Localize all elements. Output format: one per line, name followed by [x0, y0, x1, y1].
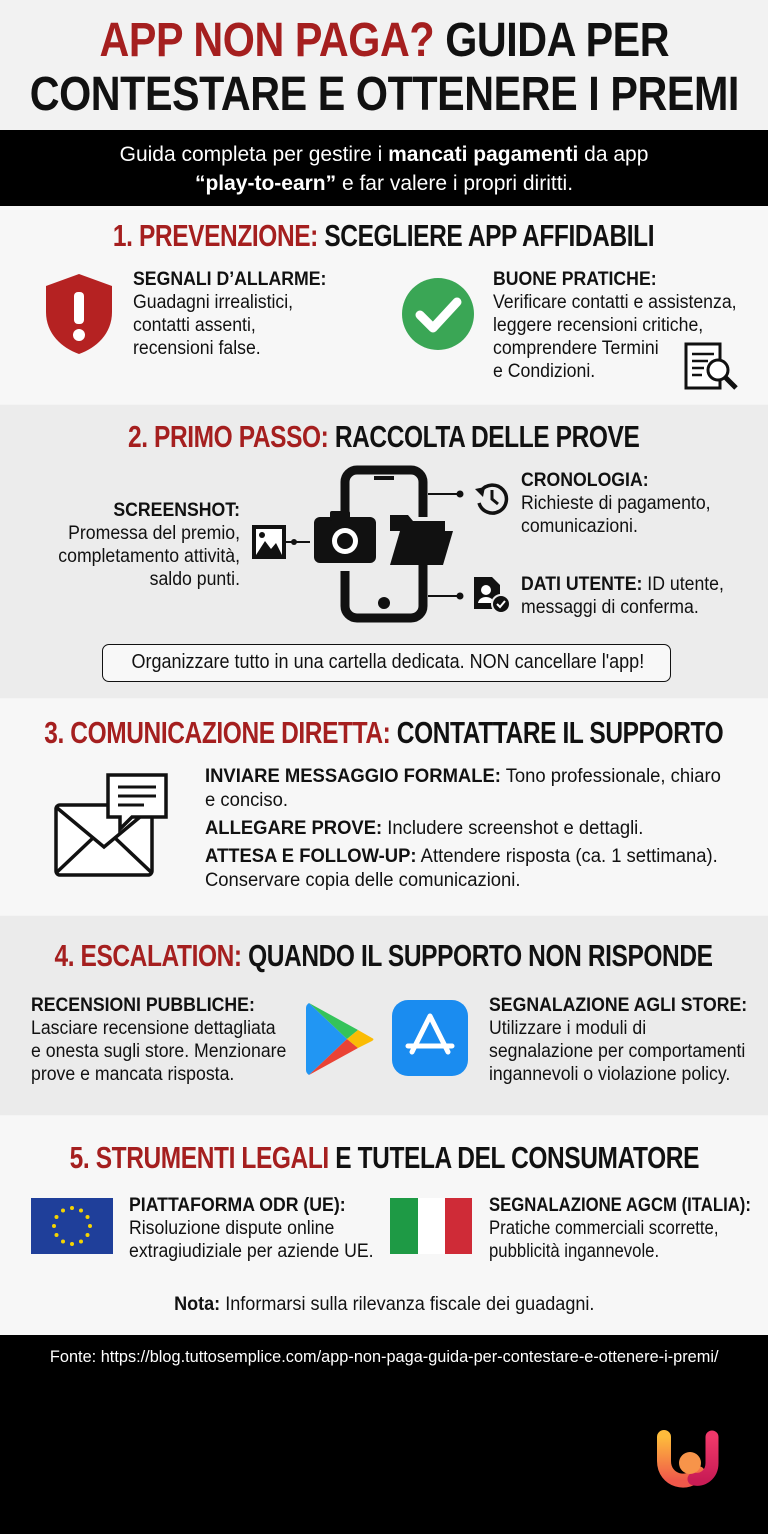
text: segnali: recensioni false. [133, 338, 261, 359]
text: buone pratiche: e Condizioni. [493, 361, 595, 382]
section 3 [0, 699, 768, 915]
section 5 [0, 1116, 768, 1335]
text: cronologia: CRONOLOGIA: [521, 470, 649, 491]
text: steps: INVIARE MESSAGGIO FORMALE: Tono professionale, chiaro [205, 766, 721, 787]
text: recensioni [31, 995, 286, 1085]
subtitle band: “play-to-earn” e far valere i propri diritti. [195, 172, 573, 195]
text: segnali [133, 269, 326, 359]
text: buone pratiche: leggere recensioni critiche, [493, 315, 703, 336]
text: screenshot [58, 500, 240, 590]
icon: warning shield [46, 274, 112, 354]
section 1 [0, 206, 768, 404]
icon: mail [54, 773, 168, 877]
text: screenshot: Promessa del premio, [68, 523, 240, 544]
logo [657, 1430, 718, 1488]
text: AGCM: Pratiche commerciali scorrette, [489, 1218, 719, 1239]
text: segnali: Guadagni irrealistici, [133, 292, 293, 313]
text: segnalazione store: Utilizzare i moduli di [489, 1018, 646, 1039]
heading 2: 2. PRIMO PASSO: RACCOLTA DELLE PROVE [128, 419, 640, 454]
icon: app store [392, 1000, 468, 1076]
heading 1: 1. PREVENZIONE: SCEGLIERE APP AFFIDABILI [113, 218, 655, 253]
text: steps: e conciso. ALLEGARE PROVE: Includere screenshot e dettagli. ATTESA E FOLLOW-UP: Attendere risposta (ca. 1 settimana). [205, 790, 718, 867]
section 4 [0, 916, 768, 1115]
title: APP NON PAGA? GUIDA PER [99, 14, 669, 67]
callout [102, 644, 671, 682]
text: screenshot: SCREENSHOT: [113, 500, 240, 521]
text: segnalazione store: SEGNALAZIONE AGLI STORE: [489, 995, 747, 1016]
text: AGCM [489, 1195, 751, 1262]
icon: check [402, 278, 474, 350]
text: ODR: Risoluzione dispute online [129, 1218, 334, 1239]
text: ODR [129, 1195, 374, 1262]
text: ODR: PIATTAFORMA ODR (UE): [129, 1195, 346, 1216]
icon: document search [684, 342, 738, 390]
footer [0, 1335, 768, 1534]
text: cronologia: Richieste di pagamento, [521, 493, 711, 514]
text: ODR: extragiudiziale per aziende UE. [129, 1241, 374, 1262]
text: AGCM: pubblicità ingannevole. [489, 1241, 659, 1262]
text: steps: Conservare copia delle comunicazioni. [205, 870, 521, 891]
text: buone pratiche [493, 269, 737, 382]
icon: Italy flag [390, 1198, 472, 1254]
text: dati utente: DATI UTENTE: ID utente, [521, 574, 724, 595]
text: cronologia: comunicazioni. [521, 516, 638, 537]
text: segnali: SEGNALI D’ALLARME: [133, 269, 326, 290]
text: screenshot: completamento attività, [58, 546, 240, 567]
text: segnalazione store: segnalazione per comportamenti [489, 1041, 745, 1062]
text: recensioni: RECENSIONI PUBBLICHE: [31, 995, 255, 1016]
text: screenshot: saldo punti. [150, 569, 240, 590]
heading 5: 5. STRUMENTI LEGALI E TUTELA DEL CONSUMATORE [69, 1140, 699, 1175]
text: dati utente [521, 574, 724, 618]
heading 3: 3. COMUNICAZIONE DIRETTA: CONTATTARE IL SUPPORTO [44, 715, 724, 750]
note: Nota: Informarsi sulla rilevanza fiscale dei guadagni. [174, 1294, 594, 1315]
heading 4: 4. ESCALATION: QUANDO IL SUPPORTO NON RISPONDE [55, 938, 713, 973]
text: dati utente: messaggi di conferma. [521, 597, 699, 618]
icon: history [475, 483, 508, 515]
title [0, 0, 768, 130]
text: segnalazione store [489, 995, 747, 1085]
text: segnalazione store: ingannevoli o violazione policy. [489, 1064, 730, 1085]
icon: EU flag [31, 1198, 113, 1254]
text: recensioni: e onesta sugli store. Menzionare [31, 1041, 286, 1062]
subtitle band [0, 130, 768, 206]
text: cronologia [521, 470, 711, 537]
icon: play store [306, 1003, 374, 1075]
text: AGCM: SEGNALAZIONE AGCM (ITALIA): [489, 1195, 751, 1216]
icon: user data [474, 577, 509, 612]
text: buone pratiche: BUONE PRATICHE: [493, 269, 657, 290]
title: CONTESTARE E OTTENERE I PREMI [29, 68, 739, 121]
text: buone pratiche: Verificare contatti e assistenza, [493, 292, 737, 313]
section 2 [0, 405, 768, 698]
text: buone pratiche: comprendere Termini [493, 338, 659, 359]
phone diagram [252, 466, 464, 622]
subtitle band: Guida completa per gestire i mancati pagamenti da app [120, 143, 648, 166]
text: recensioni: prove e mancata risposta. [31, 1064, 234, 1085]
callout: Organizzare tutto in una cartella dedicata. NON cancellare l'app! [131, 651, 644, 673]
source: Fonte: https://blog.tuttosemplice.com/app-non-paga-guida-per-contestare-e-ottenere-i-premi/ [50, 1347, 718, 1366]
text: segnali: contatti assenti, [133, 315, 256, 336]
text: steps [205, 766, 721, 891]
text: recensioni: Lasciare recensione dettagliata [31, 1018, 276, 1039]
